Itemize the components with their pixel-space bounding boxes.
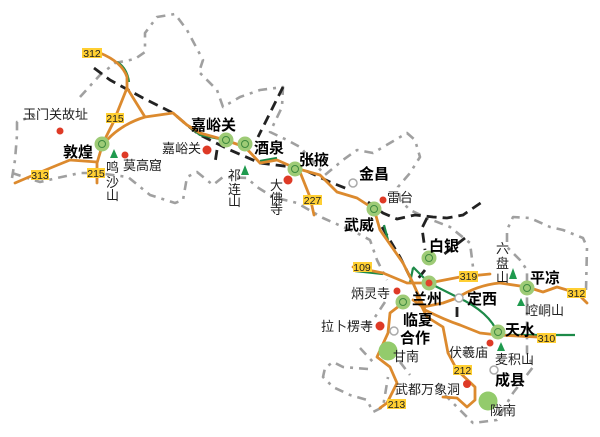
city labels: 武威 bbox=[344, 216, 374, 234]
place labels: 盘 bbox=[496, 256, 509, 271]
city labels: 酒泉 bbox=[254, 139, 284, 157]
city labels: 平凉 bbox=[530, 270, 560, 287]
highway badges: 310 bbox=[538, 333, 555, 345]
highway badges: 109 bbox=[353, 262, 371, 274]
highway badges: 319 bbox=[460, 271, 477, 283]
highway badges: 227 bbox=[304, 195, 321, 207]
city labels: 金昌 bbox=[359, 165, 389, 183]
highway badges: 312 bbox=[568, 288, 585, 300]
city labels bbox=[63, 117, 560, 389]
great wall bbox=[94, 68, 482, 322]
place labels: 山 bbox=[496, 270, 509, 285]
city markers bbox=[94, 132, 534, 374]
place labels: 连 bbox=[228, 182, 241, 197]
place labels: 佛 bbox=[270, 191, 283, 206]
place labels: 炳灵寺 bbox=[351, 286, 390, 301]
city labels: 定西 bbox=[467, 290, 497, 308]
place labels: 伏羲庙 bbox=[449, 345, 488, 360]
place labels bbox=[23, 107, 564, 418]
city labels: 天水 bbox=[505, 322, 535, 339]
city labels: 张掖 bbox=[299, 151, 329, 169]
place labels: 山 bbox=[106, 188, 119, 203]
place labels: 麦积山 bbox=[495, 352, 534, 367]
highway badges: 213 bbox=[388, 399, 405, 411]
city labels: 敦煌 bbox=[63, 143, 93, 161]
region circle: Longnan bbox=[478, 392, 498, 410]
city labels: 临夏 bbox=[403, 311, 433, 329]
place labels: 沙 bbox=[106, 175, 119, 190]
place labels: 武都万象洞 bbox=[395, 382, 460, 397]
mountain markers bbox=[110, 149, 525, 351]
highway badges: 215 bbox=[87, 168, 105, 180]
city labels: 白银 bbox=[429, 237, 459, 255]
highway badges bbox=[31, 48, 586, 411]
place labels: 拉卜楞寺 bbox=[321, 319, 373, 334]
place labels: 玉门关故址 bbox=[23, 107, 88, 122]
place labels: 崆峒山 bbox=[525, 303, 564, 318]
place labels: 鸣 bbox=[106, 160, 119, 175]
place labels: 嘉峪关 bbox=[162, 141, 201, 156]
city labels: 嘉峪关 bbox=[191, 117, 236, 134]
place labels: 甘南 bbox=[393, 349, 419, 364]
green railway segments bbox=[117, 62, 575, 335]
city labels: 合作 bbox=[400, 329, 430, 347]
highway badges: 313 bbox=[31, 170, 49, 182]
road network bbox=[15, 53, 587, 408]
highway badges: 312 bbox=[83, 48, 101, 60]
place labels: 六 bbox=[496, 241, 509, 256]
place labels: 寺 bbox=[270, 202, 283, 217]
place labels: 山 bbox=[228, 194, 241, 209]
city labels: 兰州 bbox=[412, 290, 442, 308]
place labels: 大 bbox=[270, 178, 283, 193]
highway badges: 215 bbox=[106, 113, 124, 125]
highway badges: 212 bbox=[454, 365, 471, 377]
city labels: 成县 bbox=[495, 371, 525, 389]
scenic spot markers bbox=[56, 128, 494, 388]
place labels: 雷台 bbox=[387, 190, 413, 205]
place labels: 莫高窟 bbox=[123, 158, 162, 173]
region circle: Gannan bbox=[378, 342, 398, 360]
place labels: 陇南 bbox=[490, 403, 516, 418]
place labels: 祁 bbox=[228, 168, 241, 183]
